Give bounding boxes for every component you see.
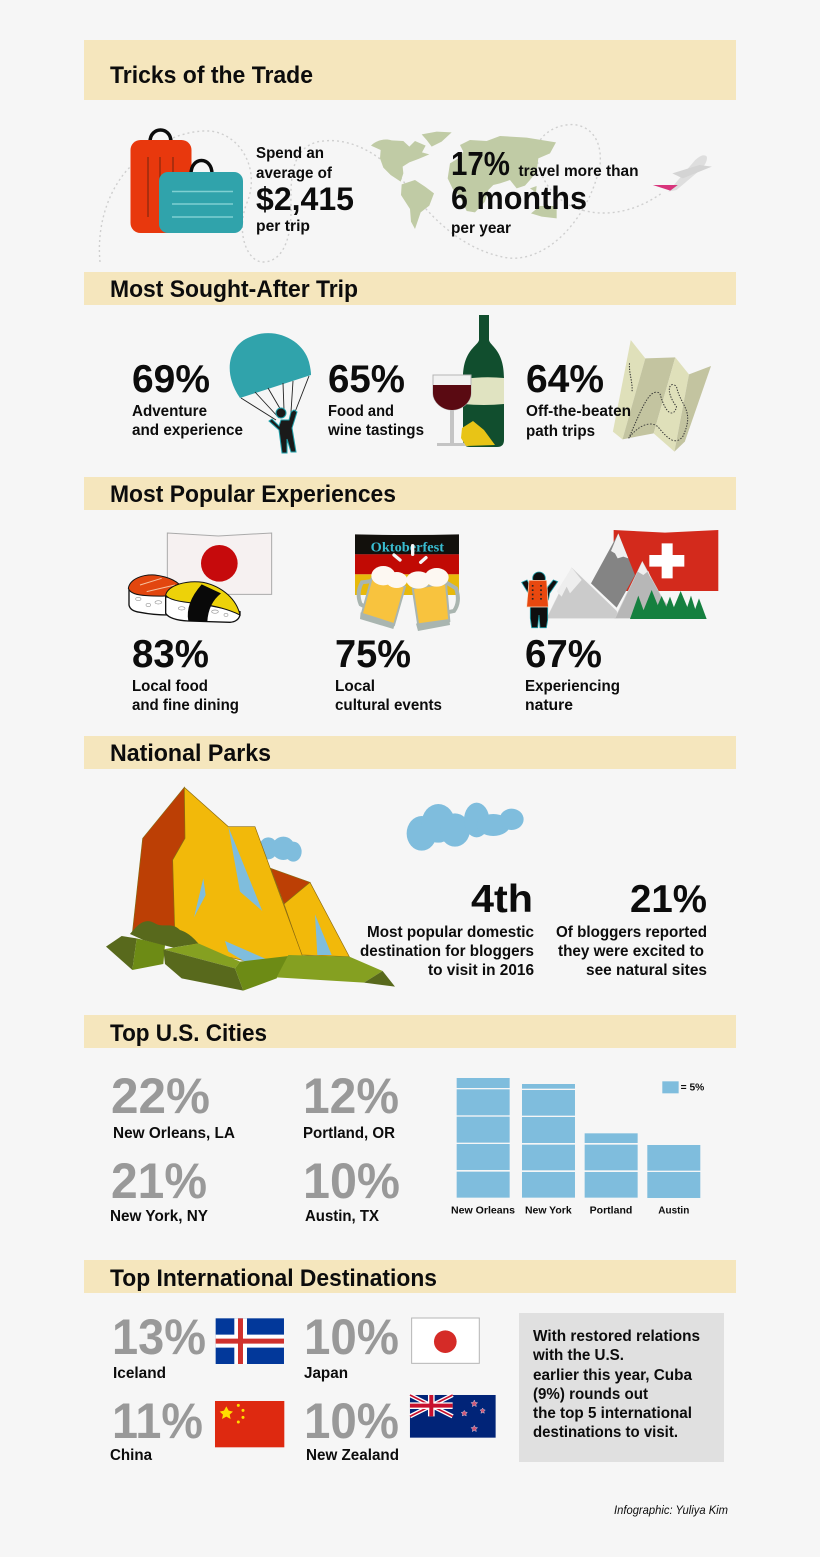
stat: 4th most popular domestic destination bbox=[360, 878, 534, 979]
stat: 65% food and wine: 65% bbox=[328, 358, 405, 401]
stat: 67% experiencing nature: 67% bbox=[525, 633, 602, 676]
callout: Cuba: (9%) rounds out bbox=[533, 1386, 649, 1403]
stat: 65% food and wine bbox=[327, 358, 424, 439]
icon: airplane bbox=[653, 155, 712, 192]
callout: Cuba: the top 5 international bbox=[533, 1405, 692, 1422]
stat: 21% excited to see natural sites: they were excited to bbox=[558, 943, 704, 960]
icon: flag of Iceland bbox=[216, 1318, 284, 1364]
callout: Cuba bbox=[519, 1313, 724, 1462]
stat: 75% local cultural events bbox=[335, 633, 442, 714]
icon: hiker, mountains and Swiss flag bbox=[522, 530, 718, 628]
text: 17% travel more than 6 months: 6 months bbox=[451, 180, 587, 216]
stat: 69% adventure: Adventure bbox=[132, 403, 207, 420]
bar chart: top U.S. cities: New Orleans bbox=[451, 1205, 515, 1216]
stat: 75% local cultural events: Local bbox=[335, 678, 375, 695]
stat: Iceland 13%: 13% bbox=[112, 1309, 206, 1365]
stat: 21% excited to see natural sites: see natural sites bbox=[586, 962, 707, 979]
stat: China 11%: China bbox=[110, 1447, 152, 1464]
stat: 83% local food: 83% bbox=[132, 633, 209, 676]
stat: 64% off-the-beaten path bbox=[526, 358, 631, 440]
stat: New Zealand 10%: 10% bbox=[304, 1393, 399, 1449]
stat: Iceland 13%: Iceland bbox=[113, 1365, 166, 1382]
icon: flag of New Zealand bbox=[410, 1395, 496, 1438]
heading: Most Popular Experiences: Most Popular Experiences bbox=[110, 481, 396, 508]
stat: 83% local food: and fine dining bbox=[132, 697, 239, 714]
heading: National Parks bbox=[84, 736, 736, 769]
stat: 67% experiencing nature: nature bbox=[525, 697, 573, 714]
heading: National Parks: National Parks bbox=[110, 740, 271, 767]
stat: 69% adventure: 69% bbox=[132, 358, 210, 401]
stat: 21% excited to see natural sites: 21% bbox=[630, 878, 707, 921]
stats: top U.S. cities: 21% bbox=[111, 1153, 207, 1209]
stats: top U.S. cities: New York, NY bbox=[110, 1208, 208, 1225]
callout: Cuba: With restored relations bbox=[533, 1328, 700, 1345]
stats: top U.S. cities: 22% bbox=[111, 1068, 210, 1124]
stat: 69% adventure: and experience bbox=[132, 422, 243, 439]
icon: Oktoberfest flag and beer mugs: Oktoberfest bbox=[371, 540, 445, 555]
text: average spend per trip: Spend an bbox=[256, 145, 324, 162]
stat: 64% off-the-beaten path: 64% bbox=[526, 358, 604, 401]
stat: China 11%: 11% bbox=[112, 1393, 203, 1449]
stat: 4th most popular domestic destination: 4th bbox=[471, 878, 533, 921]
stats: top U.S. cities bbox=[110, 1068, 400, 1225]
illustration: mountain, clouds and grass bbox=[106, 787, 524, 991]
heading: Most Popular Experiences bbox=[84, 477, 736, 510]
icon: Oktoberfest flag and beer mugs bbox=[355, 534, 459, 631]
stat: 4th most popular domestic destination: to visit in 2016 bbox=[428, 962, 534, 979]
text: 17% travel more than 6 months: 17% bbox=[451, 145, 510, 182]
text: 17% travel more than 6 months bbox=[451, 145, 638, 237]
stats: top U.S. cities: Austin, TX bbox=[305, 1208, 379, 1225]
stat: 75% local cultural events: cultural events bbox=[335, 697, 442, 714]
heading: Tricks of the Trade: Tricks of the Trade bbox=[110, 62, 313, 89]
stat: 67% experiencing nature: Experiencing bbox=[525, 678, 620, 695]
bar chart: top U.S. cities: Portland bbox=[590, 1205, 632, 1216]
stats: top U.S. cities: Portland, OR bbox=[303, 1125, 395, 1142]
stat: Japan 10%: 10% bbox=[304, 1309, 399, 1365]
callout: Cuba: earlier this year, Cuba bbox=[533, 1367, 692, 1384]
callout: Cuba: with the U.S. bbox=[532, 1347, 624, 1364]
stat: 65% food and wine: wine tastings bbox=[327, 422, 424, 439]
stat: 64% off-the-beaten path: path trips bbox=[526, 423, 595, 440]
icon: wine bottle, glass and cheese bbox=[433, 315, 504, 447]
stat: 75% local cultural events: 75% bbox=[335, 633, 411, 676]
bar chart: top U.S. cities bbox=[451, 1078, 705, 1216]
heading: Tricks of the Trade bbox=[84, 40, 736, 100]
icon: suitcases bbox=[130, 130, 243, 233]
icon: Japanese flag and sushi bbox=[128, 533, 272, 622]
credit: Infographic: Yuliya Kim bbox=[614, 1503, 728, 1517]
icon: flag of Japan bbox=[412, 1318, 479, 1363]
stat: New Zealand 10%: New Zealand bbox=[306, 1447, 399, 1464]
heading: Top U.S. Cities bbox=[84, 1015, 736, 1048]
text: 17% travel more than 6 months: travel more than bbox=[518, 163, 638, 180]
stat: 21% excited to see natural sites: Of bloggers reported bbox=[556, 924, 707, 941]
heading: Most Sought-After Trip bbox=[84, 272, 736, 305]
heading: Top U.S. Cities: Top U.S. Cities bbox=[110, 1020, 267, 1047]
bar chart: top U.S. cities: New York bbox=[525, 1205, 572, 1216]
text: average spend per trip bbox=[256, 145, 354, 235]
text: average spend per trip: $2,415 bbox=[256, 181, 354, 217]
stat: 65% food and wine: Food and bbox=[328, 403, 394, 420]
icon: parachutist bbox=[230, 333, 311, 453]
stats: top U.S. cities: New Orleans, LA bbox=[113, 1125, 235, 1142]
stat: 21% excited to see natural sites bbox=[556, 878, 707, 979]
text: 17% travel more than 6 months: per year bbox=[451, 220, 511, 237]
icon: world map bbox=[371, 132, 557, 229]
icon: folded map bbox=[613, 340, 711, 452]
stat: 69% adventure bbox=[132, 358, 243, 439]
stat: 4th most popular domestic destination: destination for bloggers bbox=[360, 943, 534, 960]
stat: Japan 10%: Japan bbox=[304, 1365, 348, 1382]
stat: 83% local food: Local food bbox=[132, 678, 208, 695]
text: average spend per trip: average of bbox=[256, 165, 333, 182]
icon: flag of China bbox=[215, 1401, 284, 1447]
callout: Cuba: destinations to visit. bbox=[533, 1424, 678, 1441]
bar chart: top U.S. cities: Austin bbox=[658, 1205, 689, 1216]
text: average spend per trip: per trip bbox=[256, 218, 310, 235]
stats: top U.S. cities: 12% bbox=[303, 1068, 399, 1124]
stat: 4th most popular domestic destination: Most popular domestic bbox=[367, 924, 534, 941]
stat: 83% local food bbox=[132, 633, 239, 714]
heading: Top International Destinations: Top International Destinations bbox=[110, 1265, 437, 1292]
heading: Top International Destinations bbox=[84, 1260, 736, 1293]
stat: 67% experiencing nature bbox=[525, 633, 620, 714]
stat: 64% off-the-beaten path: Off-the-beaten bbox=[526, 403, 631, 420]
stats: top U.S. cities: 10% bbox=[303, 1153, 400, 1209]
heading: Most Sought-After Trip: Most Sought-After Trip bbox=[110, 276, 358, 303]
dotted flight path bbox=[99, 125, 662, 262]
bar chart: top U.S. cities: = 5% bbox=[681, 1083, 705, 1094]
